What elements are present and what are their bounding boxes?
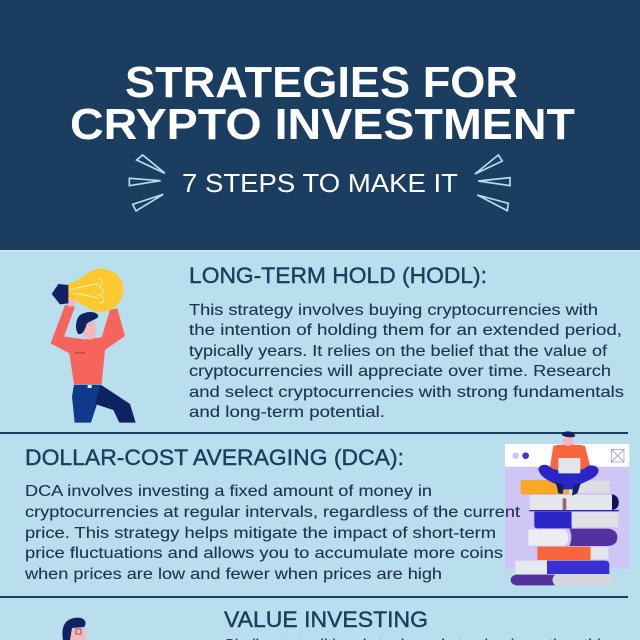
heading: VALUE INVESTING <box>224 607 428 632</box>
text block: cryptocurrencies will appreciate over time. Research <box>189 363 611 380</box>
title: CRYPTO INVESTMENT <box>70 100 575 149</box>
icon: person with laptop on stacked books <box>505 431 629 585</box>
icon: man lifting light bulb <box>51 268 136 423</box>
text block: when prices are low and fewer when prices are high <box>24 566 442 583</box>
heading: LONG-TERM HOLD (HODL): <box>189 263 487 288</box>
icon: man with glasses <box>62 618 86 640</box>
header band <box>0 0 640 252</box>
title: STRATEGIES FOR <box>125 58 518 107</box>
text block: price. This strategy helps mitigate the impact of short-term <box>25 525 496 542</box>
icon: right burst <box>475 155 510 211</box>
panel: dollar-cost averaging <box>24 431 629 585</box>
text block <box>189 302 624 421</box>
text block: typically years. It relies on the belief that the value of <box>189 343 608 360</box>
text block: and select cryptocurrencies with strong fundamentals <box>189 384 624 401</box>
title <box>70 58 575 149</box>
text block: and long-term potential. <box>189 404 385 421</box>
text block: This strategy involves buying cryptocurrencies with <box>189 302 598 319</box>
text block: DCA involves investing a fixed amount of money in <box>25 483 432 500</box>
text block: price fluctuations and allows you to accumulate more coins <box>25 545 503 562</box>
text block: the intention of holding them for an extended period, <box>189 322 622 339</box>
text block: cryptocurrencies at regular intervals, regardless of the current <box>25 504 521 521</box>
subtitle: 7 STEPS TO MAKE IT <box>182 168 458 198</box>
panel: long-term hold <box>51 263 624 423</box>
icon: left burst <box>129 155 165 211</box>
panel: value investing <box>62 607 609 640</box>
heading: DOLLAR-COST AVERAGING (DCA): <box>25 445 404 470</box>
text block <box>24 483 521 583</box>
